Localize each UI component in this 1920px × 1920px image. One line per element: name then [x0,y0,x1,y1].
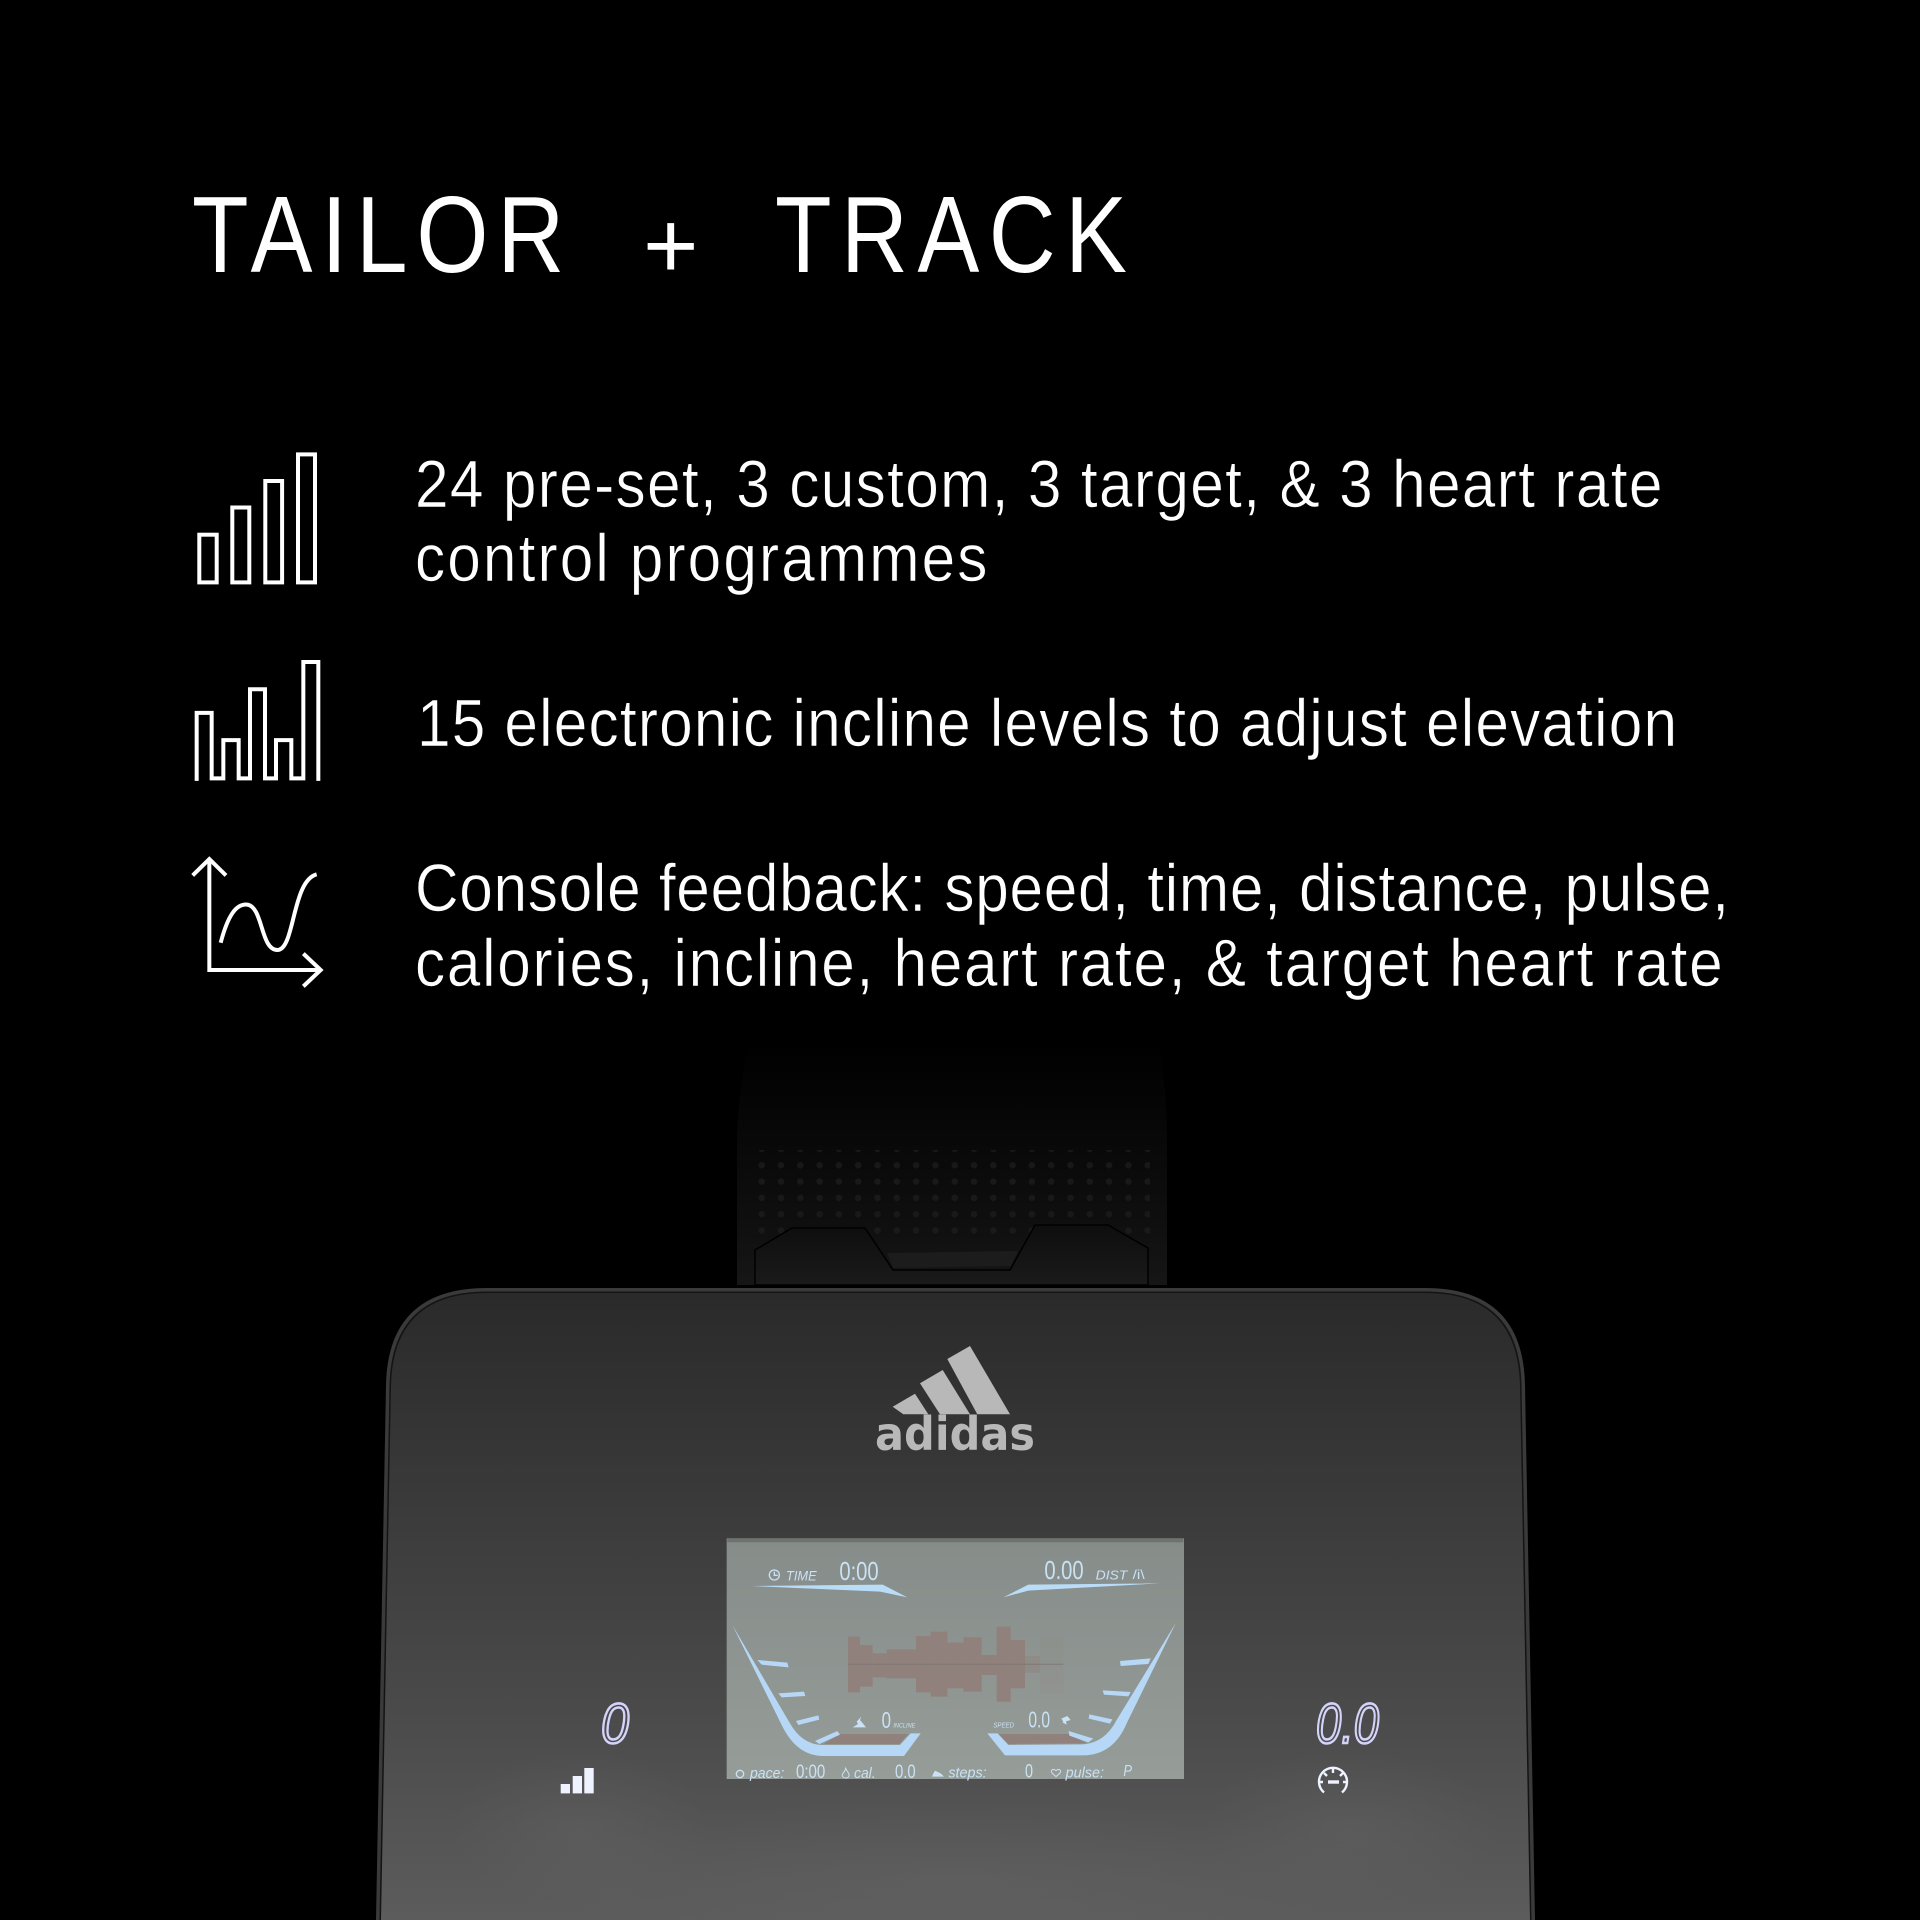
title: TAILOR [192,174,564,296]
adidas logo [875,1346,1035,1461]
lcd: readouts: 0 [1025,1761,1033,1782]
text: incline levels: 15 electronic incline levels to adjust elevation [417,685,1677,761]
lcd: red profile bars [823,1627,1087,1744]
lcd: readouts: P [1123,1763,1133,1780]
text: programmes [415,446,1662,596]
lcd screen [727,1538,1184,1783]
device holder [737,1040,1167,1285]
lcd: readouts: SPEED [993,1722,1014,1729]
icon: speedometer [1319,1768,1347,1792]
lcd: readouts: 0 [882,1707,891,1733]
lcd: readouts: cal. [854,1766,876,1782]
lcd: readouts: pace: [749,1766,784,1782]
lcd: readouts: 0.0 [1028,1706,1050,1732]
console panel [376,1288,1535,1920]
title [192,174,1127,299]
lcd: readouts: TIME [786,1567,817,1583]
panel highlights [450,1750,1500,1920]
lcd: readouts: /i\ [1133,1568,1145,1582]
lcd: readouts: DIST [1096,1567,1128,1582]
text: console feedback [415,850,1729,1001]
lcd: left incline gauge [732,1625,921,1756]
icon: feedback graph [193,859,321,986]
lcd: readouts: steps: [948,1765,987,1781]
lcd: readouts: 0.0 [895,1762,916,1783]
adidas logo: adidas [875,1407,1035,1461]
icon: incline profile [197,662,318,781]
lcd: readouts [736,1555,1145,1783]
title: TRACK [775,174,1127,296]
text: console feedback: Console feedback: speed, time, distance, pulse, [415,850,1729,926]
lcd: right speed gauge [987,1623,1176,1755]
lcd: readouts: 0.00 [1044,1555,1084,1585]
lcd: readouts: INCLINE [893,1722,916,1729]
title: + [643,193,698,299]
incline display: 0 [601,1692,629,1756]
icon: ascending bars [199,454,315,582]
lcd: readouts: 0:00 [839,1556,879,1586]
speed display: 0.0 [1316,1692,1379,1756]
text: programmes: control programmes [415,520,987,596]
lcd: readouts: pulse: [1065,1765,1104,1781]
text: console feedback: calories, incline, heart rate, & target heart rate [415,925,1723,1001]
icon: incline level bars [561,1768,594,1793]
text: programmes: 24 pre-set, 3 custom, 3 target, & 3 heart rate [415,446,1662,522]
lcd: readouts: 0:00 [796,1762,825,1783]
lcd: time and distance bars [752,1583,1160,1597]
